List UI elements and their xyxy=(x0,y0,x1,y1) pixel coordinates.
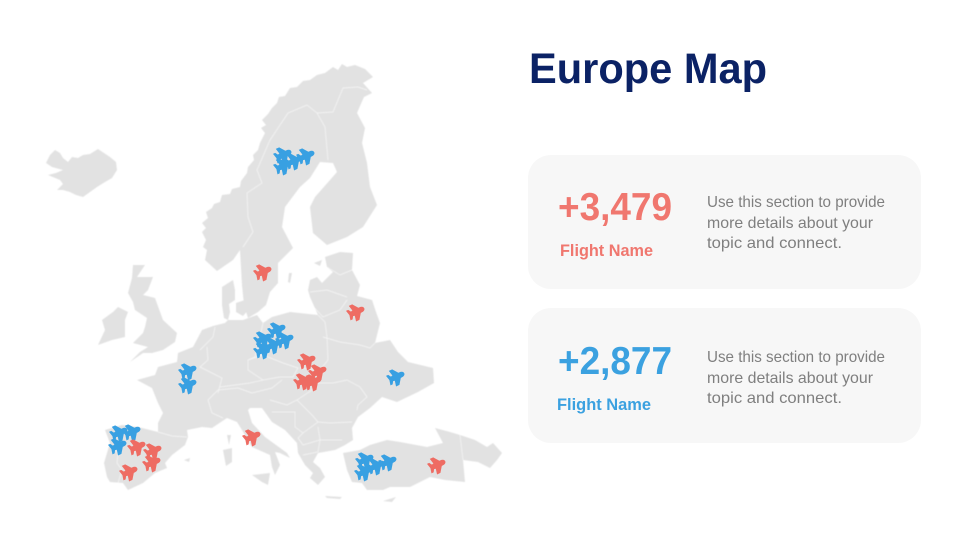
plane: Ukraine xyxy=(385,365,408,388)
Scandinavia xyxy=(202,64,377,318)
islands xyxy=(184,260,396,502)
stat number: +3,479 xyxy=(558,186,672,229)
card background xyxy=(528,308,921,443)
panel: red flight stat xyxy=(528,155,921,289)
plane group: Iberia xyxy=(107,420,144,457)
description xyxy=(707,349,885,407)
card background xyxy=(528,155,921,289)
country borders xyxy=(110,87,463,483)
Ireland xyxy=(98,307,128,345)
plane: Italy xyxy=(241,425,264,448)
description: topic and connect. xyxy=(707,235,842,252)
panel: blue flight stat xyxy=(528,308,921,443)
description: more details about your xyxy=(707,370,874,387)
plane: Belarus xyxy=(345,300,368,323)
plane group: Germany xyxy=(252,318,297,361)
plane group: Spain xyxy=(118,435,165,483)
stat label: Flight Name xyxy=(557,396,651,414)
blue flight markers xyxy=(107,143,408,483)
red flight markers xyxy=(118,260,449,483)
description xyxy=(707,194,885,252)
land masses xyxy=(46,64,502,502)
plane: Sweden xyxy=(252,260,275,283)
plane group: Central Europe xyxy=(292,349,330,393)
plane group: Sweden xyxy=(272,143,318,177)
stat number: +2,877 xyxy=(558,340,672,383)
description: Use this section to provide xyxy=(707,349,885,366)
Danish islands xyxy=(236,300,250,316)
Iceland xyxy=(46,149,117,197)
Turkey and Caucasus xyxy=(343,428,502,490)
map of Europe xyxy=(46,64,502,502)
Great Britain xyxy=(128,265,177,362)
Denmark xyxy=(222,280,235,320)
title: Europe Map xyxy=(529,45,767,93)
continental Europe xyxy=(104,252,434,490)
description: Use this section to provide xyxy=(707,194,885,211)
stat label: Flight Name xyxy=(560,242,653,260)
description: topic and connect. xyxy=(707,390,842,407)
plane group: France xyxy=(177,359,200,396)
plane: Turkey xyxy=(426,453,449,476)
description: more details about your xyxy=(707,215,874,232)
plane group: Turkey xyxy=(353,448,400,483)
